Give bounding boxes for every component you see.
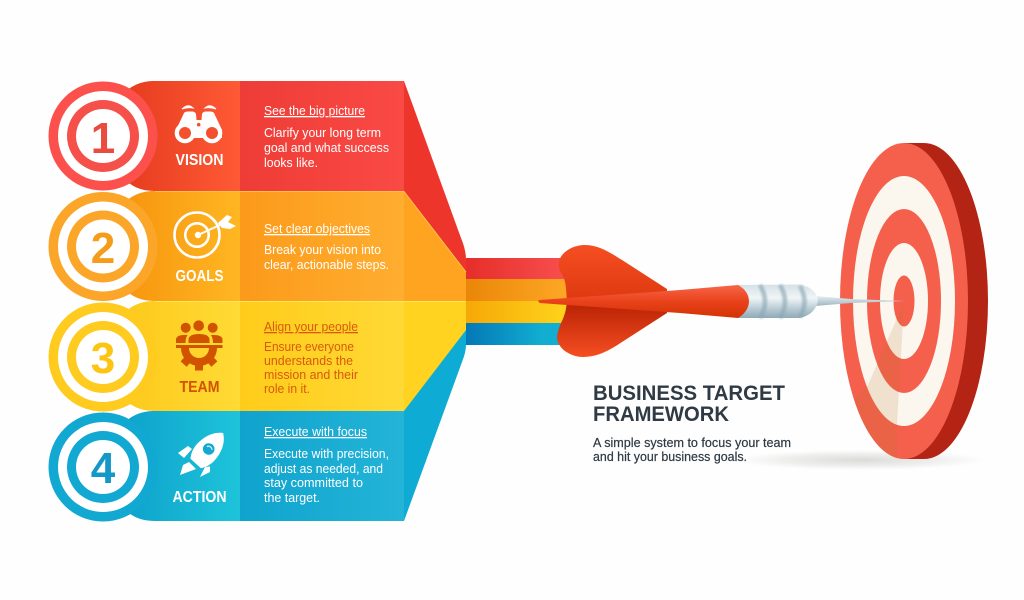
text: see the big picture: Clarify your long term [264,125,381,140]
dart flight upper [559,245,667,303]
badge: number 2 [48,192,158,301]
icon: team gear [176,320,222,370]
text: align your people: mission and their [264,367,359,382]
text: execute with focus: adjust as needed, and [264,461,383,476]
text: see the big picture: goal and what success [264,140,389,155]
panel: action band [125,323,466,521]
label: action: ACTION [172,489,226,506]
icon: target with arrow [174,212,236,258]
label: vision: VISION [176,152,224,169]
badge: number 3: 3 [91,334,115,383]
icon: binoculars [175,106,222,143]
badge: number 1: 1 [91,114,115,163]
badge: number 4: 4 [91,444,116,493]
text: execute with focus: stay committed to [264,475,363,490]
text: execute with focus: the target. [264,490,320,505]
icon: rocket [178,425,232,477]
target ground shadow [735,450,985,470]
badge: number 3 [48,302,158,412]
text: align your people [264,319,359,396]
text: align your people: Ensure everyone [264,339,354,354]
subtitle: A simple system to focus your team [593,436,791,450]
text: see the big picture: See the big picture [264,103,365,118]
dart flight lower [557,300,667,357]
text: see the big picture: looks like. [264,155,318,170]
text: execute with focus [264,424,389,505]
target board [840,143,988,459]
text: set clear objectives: Set clear objectives [264,221,370,236]
stripes: dart tail ribbons [466,258,576,345]
text: align your people: understands the [264,353,353,368]
panel: team band [125,301,466,411]
badge: number 4 [48,412,158,522]
dart [538,245,904,357]
text: execute with focus: Execute with focus [264,424,367,439]
text: set clear objectives: clear, actionable steps. [264,257,389,272]
panel: vision band [125,81,466,279]
dart needle [815,296,904,306]
dart shaft [538,285,749,318]
badge: number 2: 2 [91,224,115,273]
text: see the big picture [264,103,389,170]
title [593,381,785,426]
badge: number 1 [48,82,158,190]
text: set clear objectives [264,221,389,272]
dart silver grip [738,284,818,318]
title: FRAMEWORK [593,402,729,426]
subtitle: and hit your business goals. [593,450,747,464]
text: align your people: Align your people [264,319,358,334]
text: set clear objectives: Break your vision into [264,242,381,257]
label: goals: GOALS [176,268,224,285]
label: team: TEAM [180,379,220,396]
panel: goals band [125,191,466,301]
text: execute with focus: Execute with precision, [264,446,389,461]
title: BUSINESS TARGET [593,381,785,405]
subtitle [593,436,791,464]
text: align your people: role in it. [264,381,310,396]
